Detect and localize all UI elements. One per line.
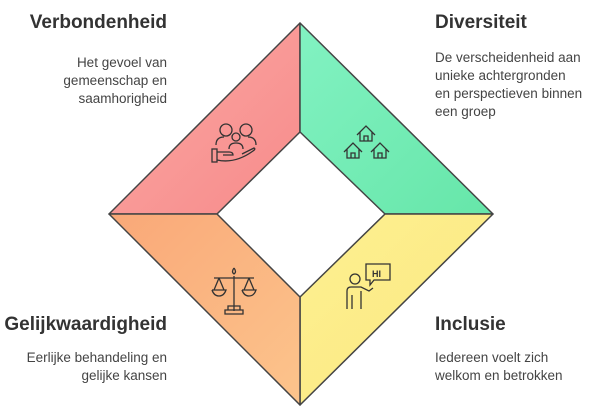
heading: Gelijkwaardigheid: Gelijkwaardigheid	[4, 314, 167, 335]
text: Inclusie	[435, 350, 563, 383]
icon: houses	[344, 126, 389, 158]
heading: Diversiteit: Diversiteit	[435, 12, 527, 33]
segment: Inclusie	[300, 214, 493, 405]
icon: community hand	[212, 124, 256, 162]
text: Diversiteit: en perspectieven binnen	[435, 86, 582, 101]
text: Verbondenheid: Het gevoel van	[77, 55, 167, 70]
text: Diversiteit: een groep	[435, 104, 496, 119]
text: Verbondenheid	[63, 55, 167, 106]
segment: Verbondenheid	[109, 23, 300, 214]
text: Gelijkwaardigheid: gelijke kansen	[81, 368, 167, 383]
text: Verbondenheid: gemeenschap en	[63, 73, 167, 88]
segment: Diversiteit	[300, 23, 493, 214]
text: Diversiteit: unieke achtergronden	[435, 68, 566, 83]
text: Inclusie: Iedereen voelt zich	[435, 350, 548, 365]
heading: Inclusie: Inclusie	[435, 314, 506, 335]
heading: Verbondenheid: Verbondenheid	[30, 12, 167, 33]
icon: person saying hi: HI	[372, 269, 381, 279]
icon: person saying hi	[347, 264, 390, 309]
text: Diversiteit: De verscheidenheid aan	[435, 50, 581, 65]
text: Inclusie: welkom en betrokken	[435, 368, 563, 383]
segment: Gelijkwaardigheid	[109, 214, 300, 405]
icon: scales	[212, 268, 256, 314]
text: Gelijkwaardigheid	[27, 350, 167, 383]
text: Gelijkwaardigheid: Eerlijke behandeling en	[27, 350, 167, 365]
text: Diversiteit	[435, 50, 582, 119]
text: Verbondenheid: saamhorigheid	[78, 91, 167, 106]
